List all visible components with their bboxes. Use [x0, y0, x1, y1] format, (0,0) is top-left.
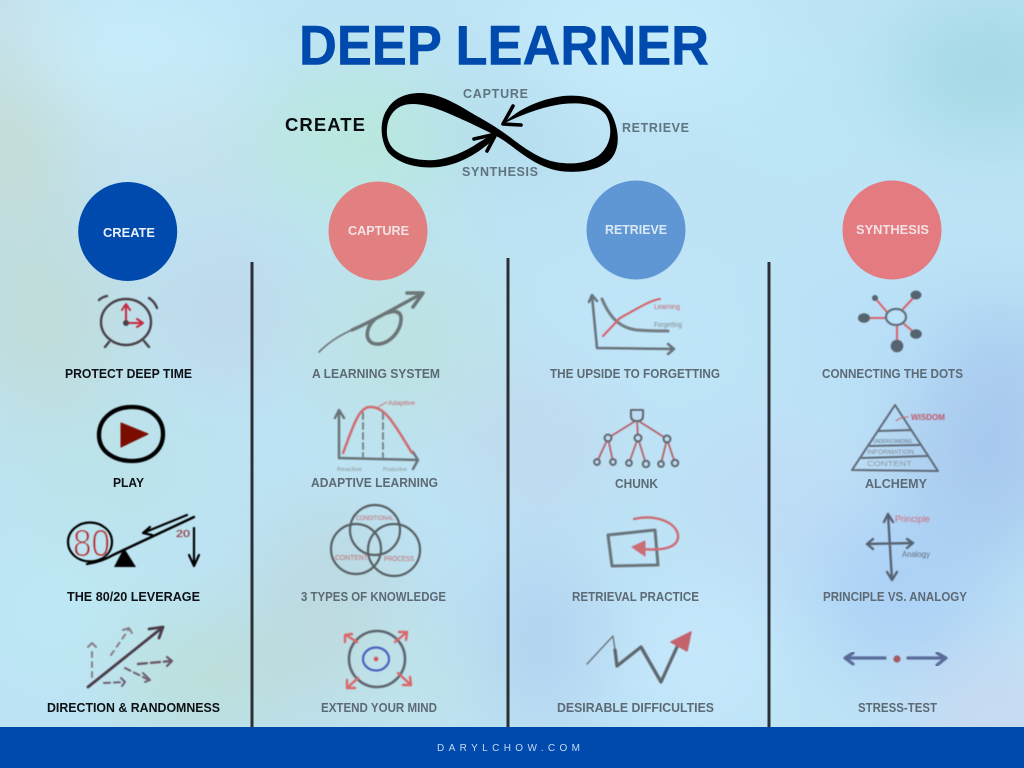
icon: three types venn diagram: CONDITIONAL — [356, 516, 395, 522]
badge: create — [78, 182, 177, 281]
icon: desirable difficulties zigzag — [587, 632, 691, 682]
label: 3 types of knowledge: 3 TYPES OF KNOWLEDGE — [301, 590, 446, 604]
icon: alchemy pyramid — [852, 405, 945, 471]
label: the upside to forgetting: THE UPSIDE TO FORGETTING — [550, 367, 720, 381]
icon: adaptive learning chart: Reactive — [337, 467, 362, 473]
column dividers — [252, 258, 769, 727]
icon: three types venn diagram: PROCESS — [384, 554, 414, 563]
icon: play button — [99, 407, 163, 461]
icon: alchemy pyramid: UNDERSTANDING — [873, 439, 912, 445]
label: capture: CAPTURE — [463, 87, 528, 101]
label: the 80/20 leverage: THE 80/20 LEVERAGE — [67, 590, 200, 604]
label: alchemy: ALCHEMY — [865, 477, 928, 491]
icon: direction and randomness arrows — [88, 627, 172, 687]
badge: retrieve — [586, 180, 686, 280]
title: DEEP LEARNER — [299, 14, 709, 76]
footer bar — [0, 727, 1024, 768]
icon: adaptive learning chart — [335, 400, 418, 473]
badge: synthesis — [842, 180, 942, 280]
label: retrieve: RETRIEVE — [622, 121, 689, 135]
icon: learning system swoosh — [319, 293, 423, 352]
panel: retrieve column — [550, 180, 720, 715]
icon: three types venn diagram — [331, 505, 420, 576]
label: direction and randomness: DIRECTION & RANDOMNESS — [47, 701, 220, 715]
label: stress-test: STRESS-TEST — [858, 701, 937, 715]
icon: connecting the dots — [858, 290, 922, 352]
label: connecting the dots: CONNECTING THE DOTS — [822, 367, 963, 381]
icon: 80/20 lever: 20 — [176, 529, 191, 540]
icon: adaptive learning chart: Adaptive — [388, 400, 415, 407]
icon: stress-test arrows — [845, 653, 946, 665]
panel: capture column — [301, 182, 446, 715]
icon: retrieval practice — [608, 517, 678, 566]
icon: alchemy pyramid: WISDOM — [911, 413, 945, 422]
icon: learning and forgetting curves: Learning — [654, 302, 680, 311]
label: principle vs. analogy: PRINCIPLE VS. ANALOGY — [823, 590, 968, 604]
icon: alchemy pyramid: INFORMATION — [867, 449, 914, 456]
badge: capture — [328, 182, 428, 280]
icon: adaptive learning chart: Productive — [383, 467, 407, 473]
icon: principle vs analogy axes: Analogy — [902, 550, 930, 559]
label: create: CREATE — [285, 114, 365, 135]
badge: capture: CAPTURE — [348, 224, 409, 238]
icon: 80/20 lever: 80 — [73, 523, 110, 565]
badge: synthesis: SYNTHESIS — [856, 223, 929, 237]
label: retrieval practice: RETRIEVAL PRACTICE — [572, 590, 699, 604]
infinity icon — [382, 93, 618, 172]
icon: 80/20 lever — [68, 515, 199, 567]
badge: retrieve: RETRIEVE — [605, 223, 667, 237]
infinity loop diagram — [285, 87, 689, 179]
label: adaptive learning: ADAPTIVE LEARNING — [311, 476, 438, 490]
label: play: PLAY — [113, 476, 145, 490]
label: chunk: CHUNK — [615, 477, 658, 491]
panel: synthesis column — [822, 180, 968, 715]
icon: learning and forgetting curves: Forgetting — [654, 320, 682, 329]
icon: principle vs analogy axes: Principle — [895, 514, 930, 524]
icon: chunk tree — [594, 410, 678, 467]
icon: three types venn diagram: CONTENT — [335, 553, 368, 562]
icon: learning and forgetting curves — [589, 295, 682, 354]
label: synthesis: SYNTHESIS — [462, 165, 538, 179]
label: extend your mind: EXTEND YOUR MIND — [321, 701, 437, 715]
label: a learning system: A LEARNING SYSTEM — [312, 367, 440, 381]
icon: extend your mind circles — [345, 631, 411, 688]
icon: alarm clock — [99, 296, 157, 347]
label: desirable difficulties: DESIRABLE DIFFICULTIES — [557, 701, 714, 715]
icon: alchemy pyramid: CONTENT — [867, 459, 913, 468]
icon: principle vs analogy axes — [867, 514, 930, 580]
footer bar: DARYLCHOW.COM — [437, 743, 580, 754]
badge: create: CREATE — [103, 225, 155, 240]
panel: create column — [47, 182, 220, 715]
label: protect deep time: PROTECT DEEP TIME — [65, 367, 192, 381]
